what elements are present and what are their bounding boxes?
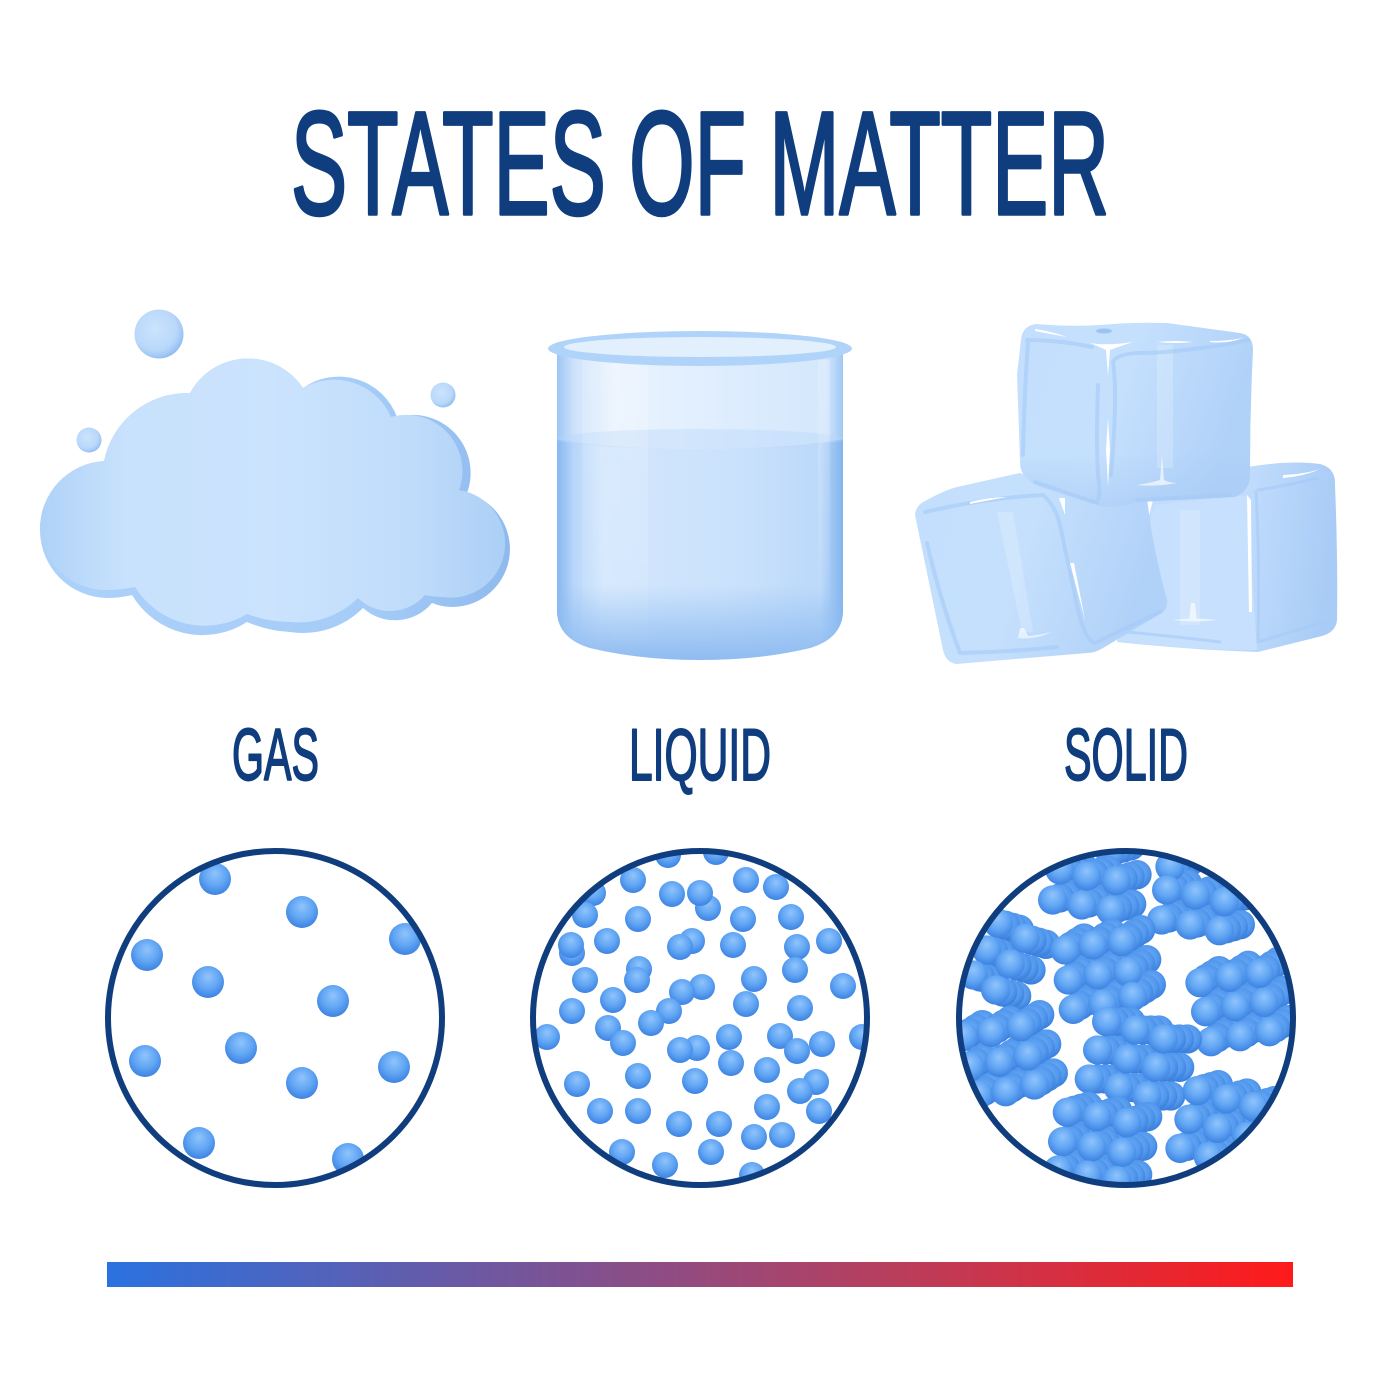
diagram: solid particles	[956, 848, 1296, 1188]
ice cube top	[1017, 323, 1253, 507]
bubble left	[76, 428, 102, 452]
icon: gas cloud	[40, 310, 510, 635]
liquid ring	[533, 851, 867, 1185]
label: solid: SOLID	[1064, 715, 1188, 796]
bubble right	[430, 382, 456, 408]
glass body	[557, 350, 843, 660]
diagram: liquid particles	[533, 839, 875, 1188]
ice cube left	[915, 473, 1167, 664]
gas ring	[108, 851, 442, 1185]
rim	[548, 331, 852, 366]
water	[557, 439, 843, 660]
cloud front layer	[40, 358, 505, 626]
diagram: gas particles	[108, 851, 442, 1185]
icon: ice cubes	[915, 323, 1337, 664]
temperature gradient bar	[107, 1262, 1293, 1287]
water surface	[557, 429, 843, 449]
water bottom shade	[557, 585, 843, 660]
cloud shadow layer	[40, 358, 510, 635]
ice cube right	[1117, 463, 1337, 652]
liquid molecules	[536, 854, 864, 1178]
gas molecules	[129, 863, 421, 1175]
glass highlight strips	[582, 360, 830, 650]
icon: beaker of liquid	[548, 331, 852, 660]
bubble large	[134, 310, 184, 358]
solid ring	[959, 851, 1293, 1185]
label: gas: GAS	[232, 715, 319, 796]
label: liquid: LIQUID	[629, 715, 771, 796]
rim opening	[564, 337, 836, 357]
solid molecules	[956, 848, 1296, 1188]
